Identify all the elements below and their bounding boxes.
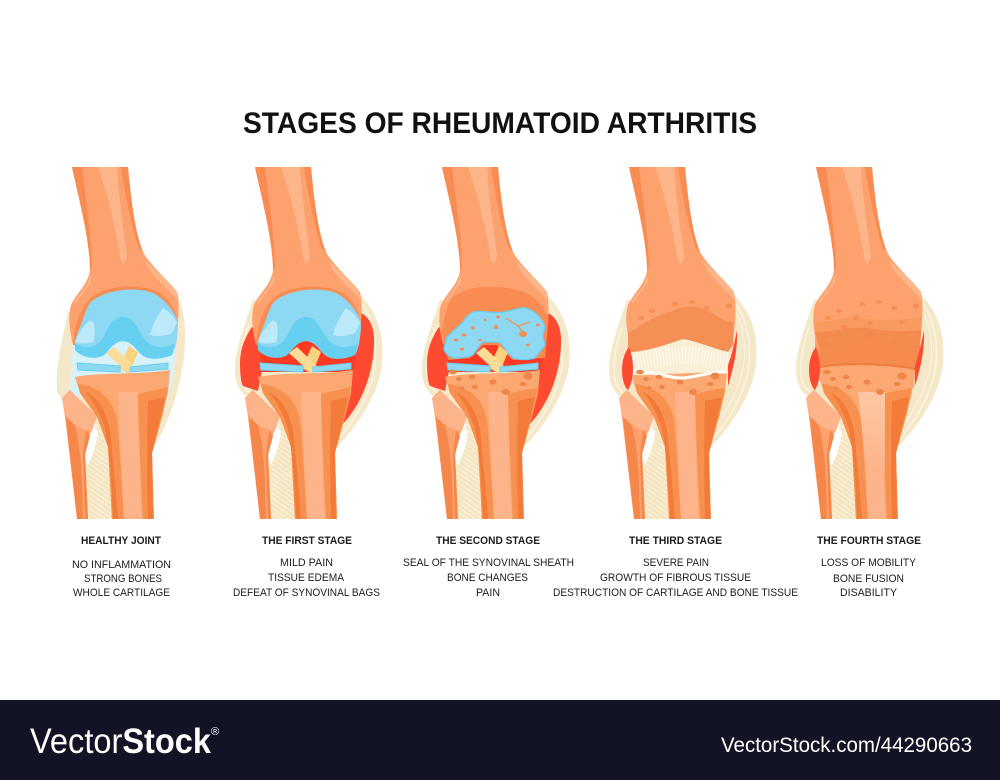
caption: fourth stage xyxy=(817,535,921,599)
caption: healthy joint: NO INFLAMMATION xyxy=(72,559,171,571)
caption: first stage: THE FIRST STAGE xyxy=(262,535,352,547)
logo wordmark: VectorStock xyxy=(30,722,211,761)
image id: VectorStock.com/44290663 xyxy=(721,734,972,757)
caption: first stage: TISSUE EDEMA xyxy=(268,572,345,584)
caption: first stage: MILD PAIN xyxy=(280,557,333,569)
caption: third stage: DESTRUCTION OF CARTILAGE AND BONE TISSUE xyxy=(553,587,798,599)
caption: third stage: THE THIRD STAGE xyxy=(629,535,722,547)
caption: fourth stage: LOSS OF MOBILITY xyxy=(821,557,917,569)
caption: healthy joint: HEALTHY JOINT xyxy=(81,535,161,547)
caption: third stage: SEVERE PAIN xyxy=(643,557,709,569)
caption: healthy joint: STRONG BONES xyxy=(84,573,162,585)
caption: second stage: THE SECOND STAGE xyxy=(436,535,540,547)
caption: second stage: SEAL OF THE SYNOVINAL SHEATH xyxy=(403,557,574,569)
registered mark: ® xyxy=(211,726,219,738)
caption: second stage: BONE CHANGES xyxy=(447,572,528,584)
footer bar xyxy=(0,700,1000,780)
caption: second stage xyxy=(403,535,574,599)
eroded cartilage xyxy=(444,308,545,360)
caption: fourth stage: THE FOURTH STAGE xyxy=(817,535,921,547)
caption: first stage: DEFEAT OF SYNOVINAL BAGS xyxy=(233,587,380,599)
caption: fourth stage: DISABILITY xyxy=(840,587,898,599)
caption: third stage xyxy=(553,535,798,599)
caption: healthy joint: WHOLE CARTILAGE xyxy=(73,587,170,599)
caption: healthy joint xyxy=(72,535,171,599)
panel: first stage knee illustration xyxy=(235,167,383,519)
caption: first stage xyxy=(233,535,380,599)
panel: healthy joint knee illustration xyxy=(57,167,185,519)
panel: second stage knee illustration xyxy=(422,167,570,519)
panel: fourth stage knee illustration xyxy=(796,167,944,519)
panel: third stage knee illustration xyxy=(609,167,757,519)
title: STAGES OF RHEUMATOID ARTHRITIS xyxy=(243,107,757,140)
caption: second stage: PAIN xyxy=(476,587,500,599)
caption: third stage: GROWTH OF FIBROUS TISSUE xyxy=(600,572,751,584)
caption: fourth stage: BONE FUSION xyxy=(833,573,904,585)
